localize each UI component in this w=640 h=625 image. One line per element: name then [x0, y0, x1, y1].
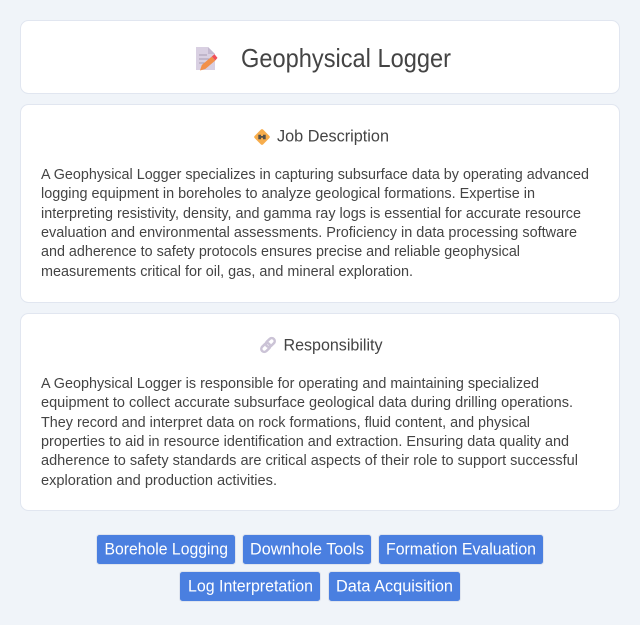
tag: Downhole Tools: Downhole Tools [250, 540, 364, 558]
icon: link [260, 337, 276, 353]
tag: Borehole Logging [96, 534, 236, 564]
text block: job description [41, 167, 589, 280]
text block: responsibility: equipment to collect accurate subsurface geological data during drilling operations. [41, 395, 573, 411]
icon: document with pencil [196, 47, 218, 70]
tag: Data Acquisition [328, 572, 460, 602]
text block: responsibility: properties to aid in resource identification and extraction. Ensuring data quality and [41, 434, 569, 450]
text block: job description: and adherence to safety protocols ensures precise and reliable geophysical [41, 244, 520, 260]
tag: Data Acquisition: Data Acquisition [336, 578, 453, 596]
tag: Downhole Tools [242, 534, 372, 564]
text block: responsibility: exploration and production activities. [41, 473, 277, 489]
tag: Formation Evaluation [378, 534, 544, 564]
panel: title [20, 20, 620, 94]
panel: job description [20, 104, 620, 302]
text block: responsibility [41, 376, 578, 489]
text block: responsibility: They record and interpret data on rock formations, fluid content, and physical [41, 415, 530, 431]
tag: Log Interpretation: Log Interpretation [188, 578, 313, 596]
tag: Borehole Logging: Borehole Logging [104, 540, 228, 558]
text block: job description: evaluation and environmental assessments. Proficiency in data processing software [41, 225, 577, 241]
heading: job description: Job Description [277, 128, 389, 146]
text block: job description: interpreting resistivity, density, and gamma ray logs is essential for accurate resource [41, 206, 581, 222]
icon: job description diamond [254, 129, 270, 145]
heading: responsibility: Responsibility [284, 336, 383, 354]
tag: Formation Evaluation: Formation Evaluation [386, 540, 536, 558]
text block: job description: A Geophysical Logger specializes in capturing subsurface data by operating advanced [41, 167, 589, 183]
text block: job description: measurements critical for oil, gas, and mineral exploration. [41, 264, 413, 280]
tag: Log Interpretation [180, 572, 320, 602]
heading: Geophysical Logger: Geophysical Logger [241, 45, 451, 73]
panel: responsibility [20, 314, 620, 510]
tags [96, 534, 544, 602]
text block: job description: logging equipment in boreholes to analyze geological formations. Expertise in [41, 186, 535, 202]
text block: responsibility: adherence to safety standards are critical aspects of their role to support successful [41, 453, 578, 469]
text block: responsibility: A Geophysical Logger is responsible for operating and maintaining specialized [41, 376, 539, 392]
